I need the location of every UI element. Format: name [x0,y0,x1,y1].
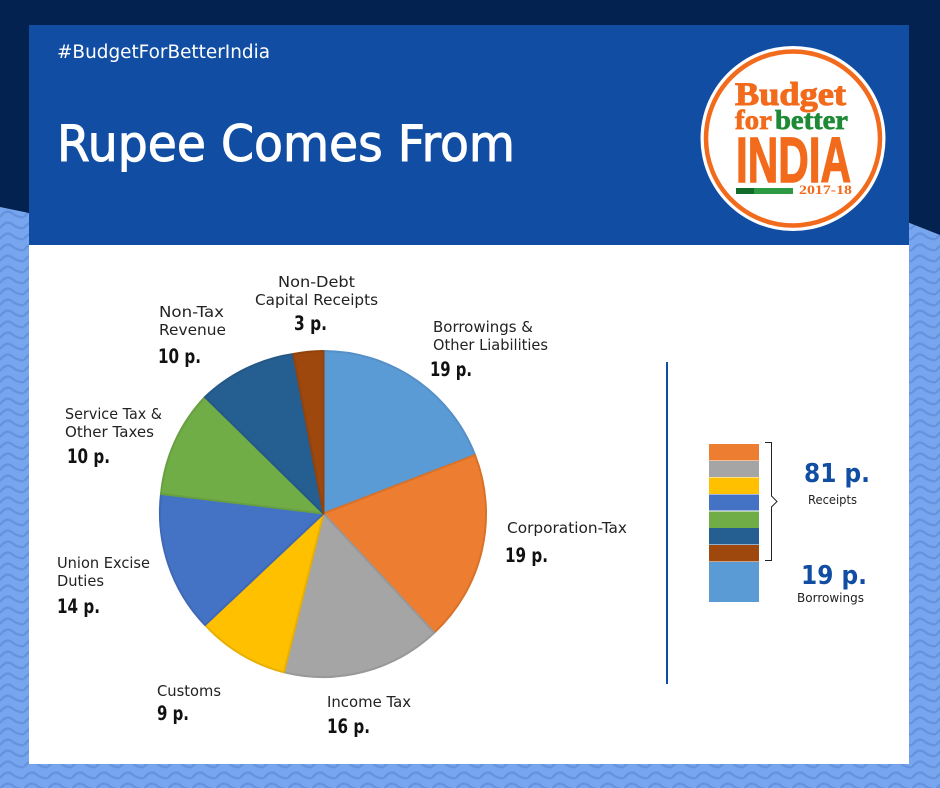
label: Non-Tax Revenue: Revenue [159,321,226,339]
slice: Borrowings [324,351,475,514]
logo: Budget for better India badge: INDIA [736,124,851,196]
slice: Non-Tax Revenue [205,354,324,514]
slice: Non-Debt Capital Receipts [293,351,324,514]
title: Rupee Comes From [57,115,515,173]
label: Corporation-Tax: Corporation-Tax [507,519,627,537]
label: Union Excise Duties: Duties [57,572,104,590]
label: Service Tax & Other Taxes: Service Tax & [65,405,162,423]
label: Borrowings & Other Liabilities: Other Liabilities [433,336,548,354]
label: Borrowings & Other Liabilities: 19 p. [430,358,472,381]
logo: Budget for better India badge: Budget [735,77,846,113]
bracket [765,442,777,560]
callout: 19 p. Borrowings: Borrowings [797,591,864,605]
callout: 81 p. Receipts [804,459,870,507]
label: Customs: 9 p. [157,702,189,725]
logo: Budget for better India badge [700,46,886,231]
vertical divider [666,362,668,684]
label: Income Tax: Income Tax [327,693,411,711]
callout: 81 p. Receipts: Receipts [808,493,857,507]
background: light blue wave pattern [0,207,940,788]
stacked bar [709,444,759,602]
label: Non-Debt Capital Receipts: 3 p. [294,312,327,335]
label: Non-Debt Capital Receipts: Non-Debt [278,273,355,291]
slice: Income Tax [284,514,434,677]
label: Non-Tax Revenue [158,303,226,368]
label: Non-Debt Capital Receipts: Capital Receipts [255,291,378,309]
pie chart [160,351,486,677]
label: Service Tax & Other Taxes: 10 p. [67,445,110,468]
panel: white content area [29,245,909,764]
logo: Budget for better India badge: better [775,105,848,135]
slice: Service Tax [161,397,324,514]
slice: Customs [205,514,324,672]
label: Service Tax & Other Taxes: Other Taxes [65,423,154,441]
label: Income Tax: 16 p. [327,715,370,738]
hashtag: #BudgetForBetterIndia [57,42,270,63]
label: Non-Tax Revenue: Non-Tax [159,303,224,321]
label: Service Tax & Other Taxes [65,405,162,468]
slice: Union Excise Duties [160,494,324,625]
label: Corporation-Tax: 19 p. [505,544,548,567]
callout: 19 p. Borrowings [797,561,867,605]
logo: Budget for better India badge: for [735,105,772,135]
label: Borrowings & Other Liabilities: Borrowings & [433,318,533,336]
slice: Corporation-Tax [324,455,486,633]
label: Customs [157,682,221,725]
label: Non-Tax Revenue: 10 p. [158,345,201,368]
label: Non-Debt Capital Receipts [255,273,378,335]
label: Union Excise Duties: Union Excise [57,554,150,572]
callout: 19 p. Borrowings: 19 p. [801,561,867,591]
logo: Budget for better India badge: 2017-18 [799,183,852,197]
label: Union Excise Duties [57,554,150,618]
label: Corporation-Tax [505,519,627,567]
callout: 81 p. Receipts: 81 p. [804,459,870,489]
label: Union Excise Duties: 14 p. [57,595,100,618]
panel: blue header [29,25,909,245]
label: Borrowings & Other Liabilities [430,318,548,381]
label: Income Tax [327,693,411,738]
label: Customs: Customs [157,682,221,700]
